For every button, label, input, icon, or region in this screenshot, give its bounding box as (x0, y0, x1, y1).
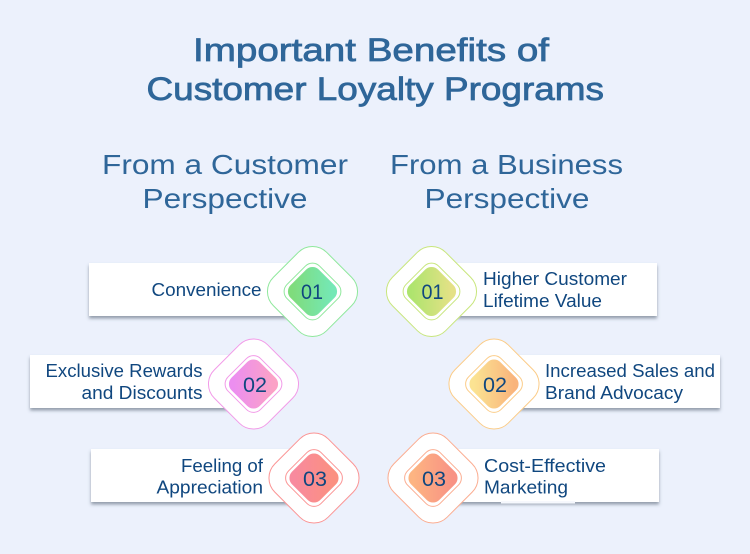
item: Exclusive Rewards and Discounts: 02 (243, 374, 267, 397)
item: Higher Customer Lifetime Value: 01 (422, 281, 444, 304)
title: Customer Loyalty Programs (146, 71, 604, 107)
title (146, 32, 604, 107)
heading: business perspective (390, 149, 623, 214)
heading: customer perspective: Perspective (142, 183, 308, 214)
item: Cost-Effective Marketing: Marketing (484, 478, 568, 498)
item: Feeling of Appreciation: 03 (303, 468, 327, 491)
item: Feeling of Appreciation: Feeling of (181, 456, 264, 476)
item: Increased Sales and Brand Advocacy: Brand Advocacy (545, 383, 683, 403)
item: Cost-Effective Marketing: Cost-Effective (484, 456, 606, 476)
item: Exclusive Rewards and Discounts (30, 331, 307, 437)
heading: customer perspective (102, 149, 348, 214)
item: Feeling of Appreciation: Appreciation (156, 478, 263, 498)
item: Higher Customer Lifetime Value (378, 238, 657, 345)
item: Cost-Effective Marketing: 03 (422, 468, 446, 491)
item: Exclusive Rewards and Discounts: and Discounts (82, 383, 202, 403)
heading: business perspective: From a Business (390, 149, 623, 180)
item: Convenience: Convenience (152, 280, 262, 300)
title: Important Benefits of (193, 32, 549, 68)
item: Increased Sales and Brand Advocacy: 02 (483, 374, 507, 397)
item: Increased Sales and Brand Advocacy: Increased Sales and (545, 361, 715, 381)
heading: business perspective: Perspective (424, 183, 590, 214)
item: Feeling of Appreciation (91, 425, 367, 531)
item: Exclusive Rewards and Discounts: Exclusive Rewards (46, 361, 202, 381)
item: Convenience (89, 238, 366, 345)
item: Higher Customer Lifetime Value: Higher Customer (483, 269, 627, 289)
item: Cost-Effective Marketing (380, 425, 659, 531)
item: Convenience: 01 (301, 281, 323, 304)
heading: customer perspective: From a Customer (102, 149, 348, 180)
item: Higher Customer Lifetime Value: Lifetime Value (483, 291, 602, 311)
item: Increased Sales and Brand Advocacy (441, 331, 720, 437)
